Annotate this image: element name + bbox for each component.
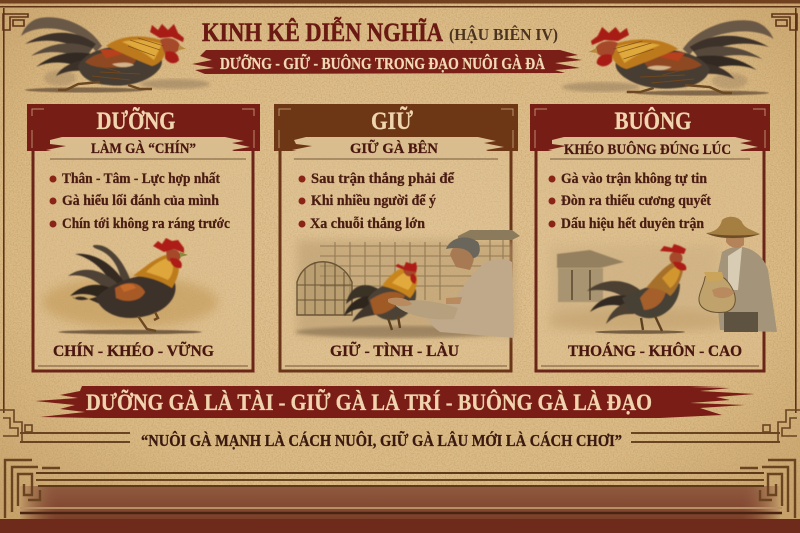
icon: rooster left header xyxy=(21,17,210,92)
bullet list: Chín tới không ra ráng trước xyxy=(62,216,231,232)
rooster xyxy=(595,330,685,334)
house xyxy=(557,250,624,268)
bullet list xyxy=(298,171,455,232)
panel: dưỡng: DƯỠNG xyxy=(96,106,176,135)
keywords: GIỮ - TÌNH - LÀU xyxy=(330,340,459,360)
bullet list: Gà hiểu lối đánh của mình xyxy=(62,193,219,209)
quote ornament left xyxy=(0,410,130,442)
illustration: man with bag and rooster xyxy=(548,217,777,334)
panel: buông: KHÉO BUÔNG ĐÚNG LÚC xyxy=(564,141,731,158)
bullet list: Gà vào trận không tự tin xyxy=(561,171,707,187)
bullet list xyxy=(548,171,711,232)
ribbon xyxy=(40,137,250,159)
quote ornament right xyxy=(631,410,800,442)
panel: giữ: GIỮ GÀ BÊN xyxy=(350,139,438,157)
panel frame xyxy=(280,150,511,371)
title: (HẬU BIÊN IV) xyxy=(449,25,558,44)
cage xyxy=(297,262,352,315)
man xyxy=(427,259,514,338)
fence xyxy=(320,238,510,300)
panel: giữ: GIỮ xyxy=(371,106,413,135)
bullet list: Sau trận thắng phải để xyxy=(311,171,455,187)
subtitle ribbon xyxy=(192,50,582,74)
top border xyxy=(0,0,800,413)
illustration: rooster running xyxy=(42,238,218,334)
panel frame xyxy=(33,150,253,371)
panel frame xyxy=(536,150,764,371)
bullet list xyxy=(50,171,231,232)
bullet list: Thân - Tâm - Lực hợp nhất xyxy=(62,171,220,187)
slogan banner xyxy=(35,384,755,418)
scene wash xyxy=(550,245,720,330)
bullet list: Dấu hiệu hết duyên trận xyxy=(561,216,704,232)
money bag xyxy=(699,274,735,312)
ground xyxy=(295,326,505,338)
quote: “NUÔI GÀ MẠNH LÀ CÁCH NUÔI, GIỮ GÀ LÂU MỚI LÀ CÁCH CHƠI” xyxy=(141,430,622,450)
bottom ornament left xyxy=(5,460,60,518)
panel: giữ xyxy=(274,104,520,371)
panel: buông xyxy=(530,104,777,371)
bullet list: Đòn ra thiếu cương quyết xyxy=(561,193,711,209)
ribbon xyxy=(544,137,758,159)
panel header xyxy=(27,104,260,151)
panel: dưỡng: LÀM GÀ “CHÍN” xyxy=(91,140,196,157)
icon: rooster right header xyxy=(562,20,773,95)
panel: buông: BUÔNG xyxy=(614,106,692,135)
hat xyxy=(706,217,760,238)
bottom band xyxy=(0,473,800,533)
title: KINH KÊ DIỄN NGHĨA xyxy=(202,18,443,47)
subtitle ribbon: DƯỠNG - GIỮ - BUÔNG TRONG ĐẠO NUÔI GÀ ĐÀ xyxy=(220,53,546,73)
scene wash xyxy=(297,240,515,335)
bullet list: Khi nhiều người để ý xyxy=(311,193,437,209)
panel header xyxy=(530,104,770,151)
rooster xyxy=(344,262,417,322)
panel: dưỡng xyxy=(27,104,260,371)
ribbon xyxy=(288,137,504,159)
panel header xyxy=(274,104,518,151)
bullet list: Xa chuỗi thắng lớn xyxy=(310,216,425,232)
keywords: CHÍN - KHÉO - VỮNG xyxy=(53,340,215,360)
bottom ornament right xyxy=(740,460,795,518)
illustration: man holding rooster xyxy=(295,230,520,338)
slogan banner: DƯỠNG GÀ LÀ TÀI - GIỮ GÀ LÀ TRÍ - BUÔNG GÀ LÀ ĐẠO xyxy=(86,389,652,415)
keywords: THOÁNG - KHÔN - CAO xyxy=(568,341,742,360)
man xyxy=(718,247,777,332)
